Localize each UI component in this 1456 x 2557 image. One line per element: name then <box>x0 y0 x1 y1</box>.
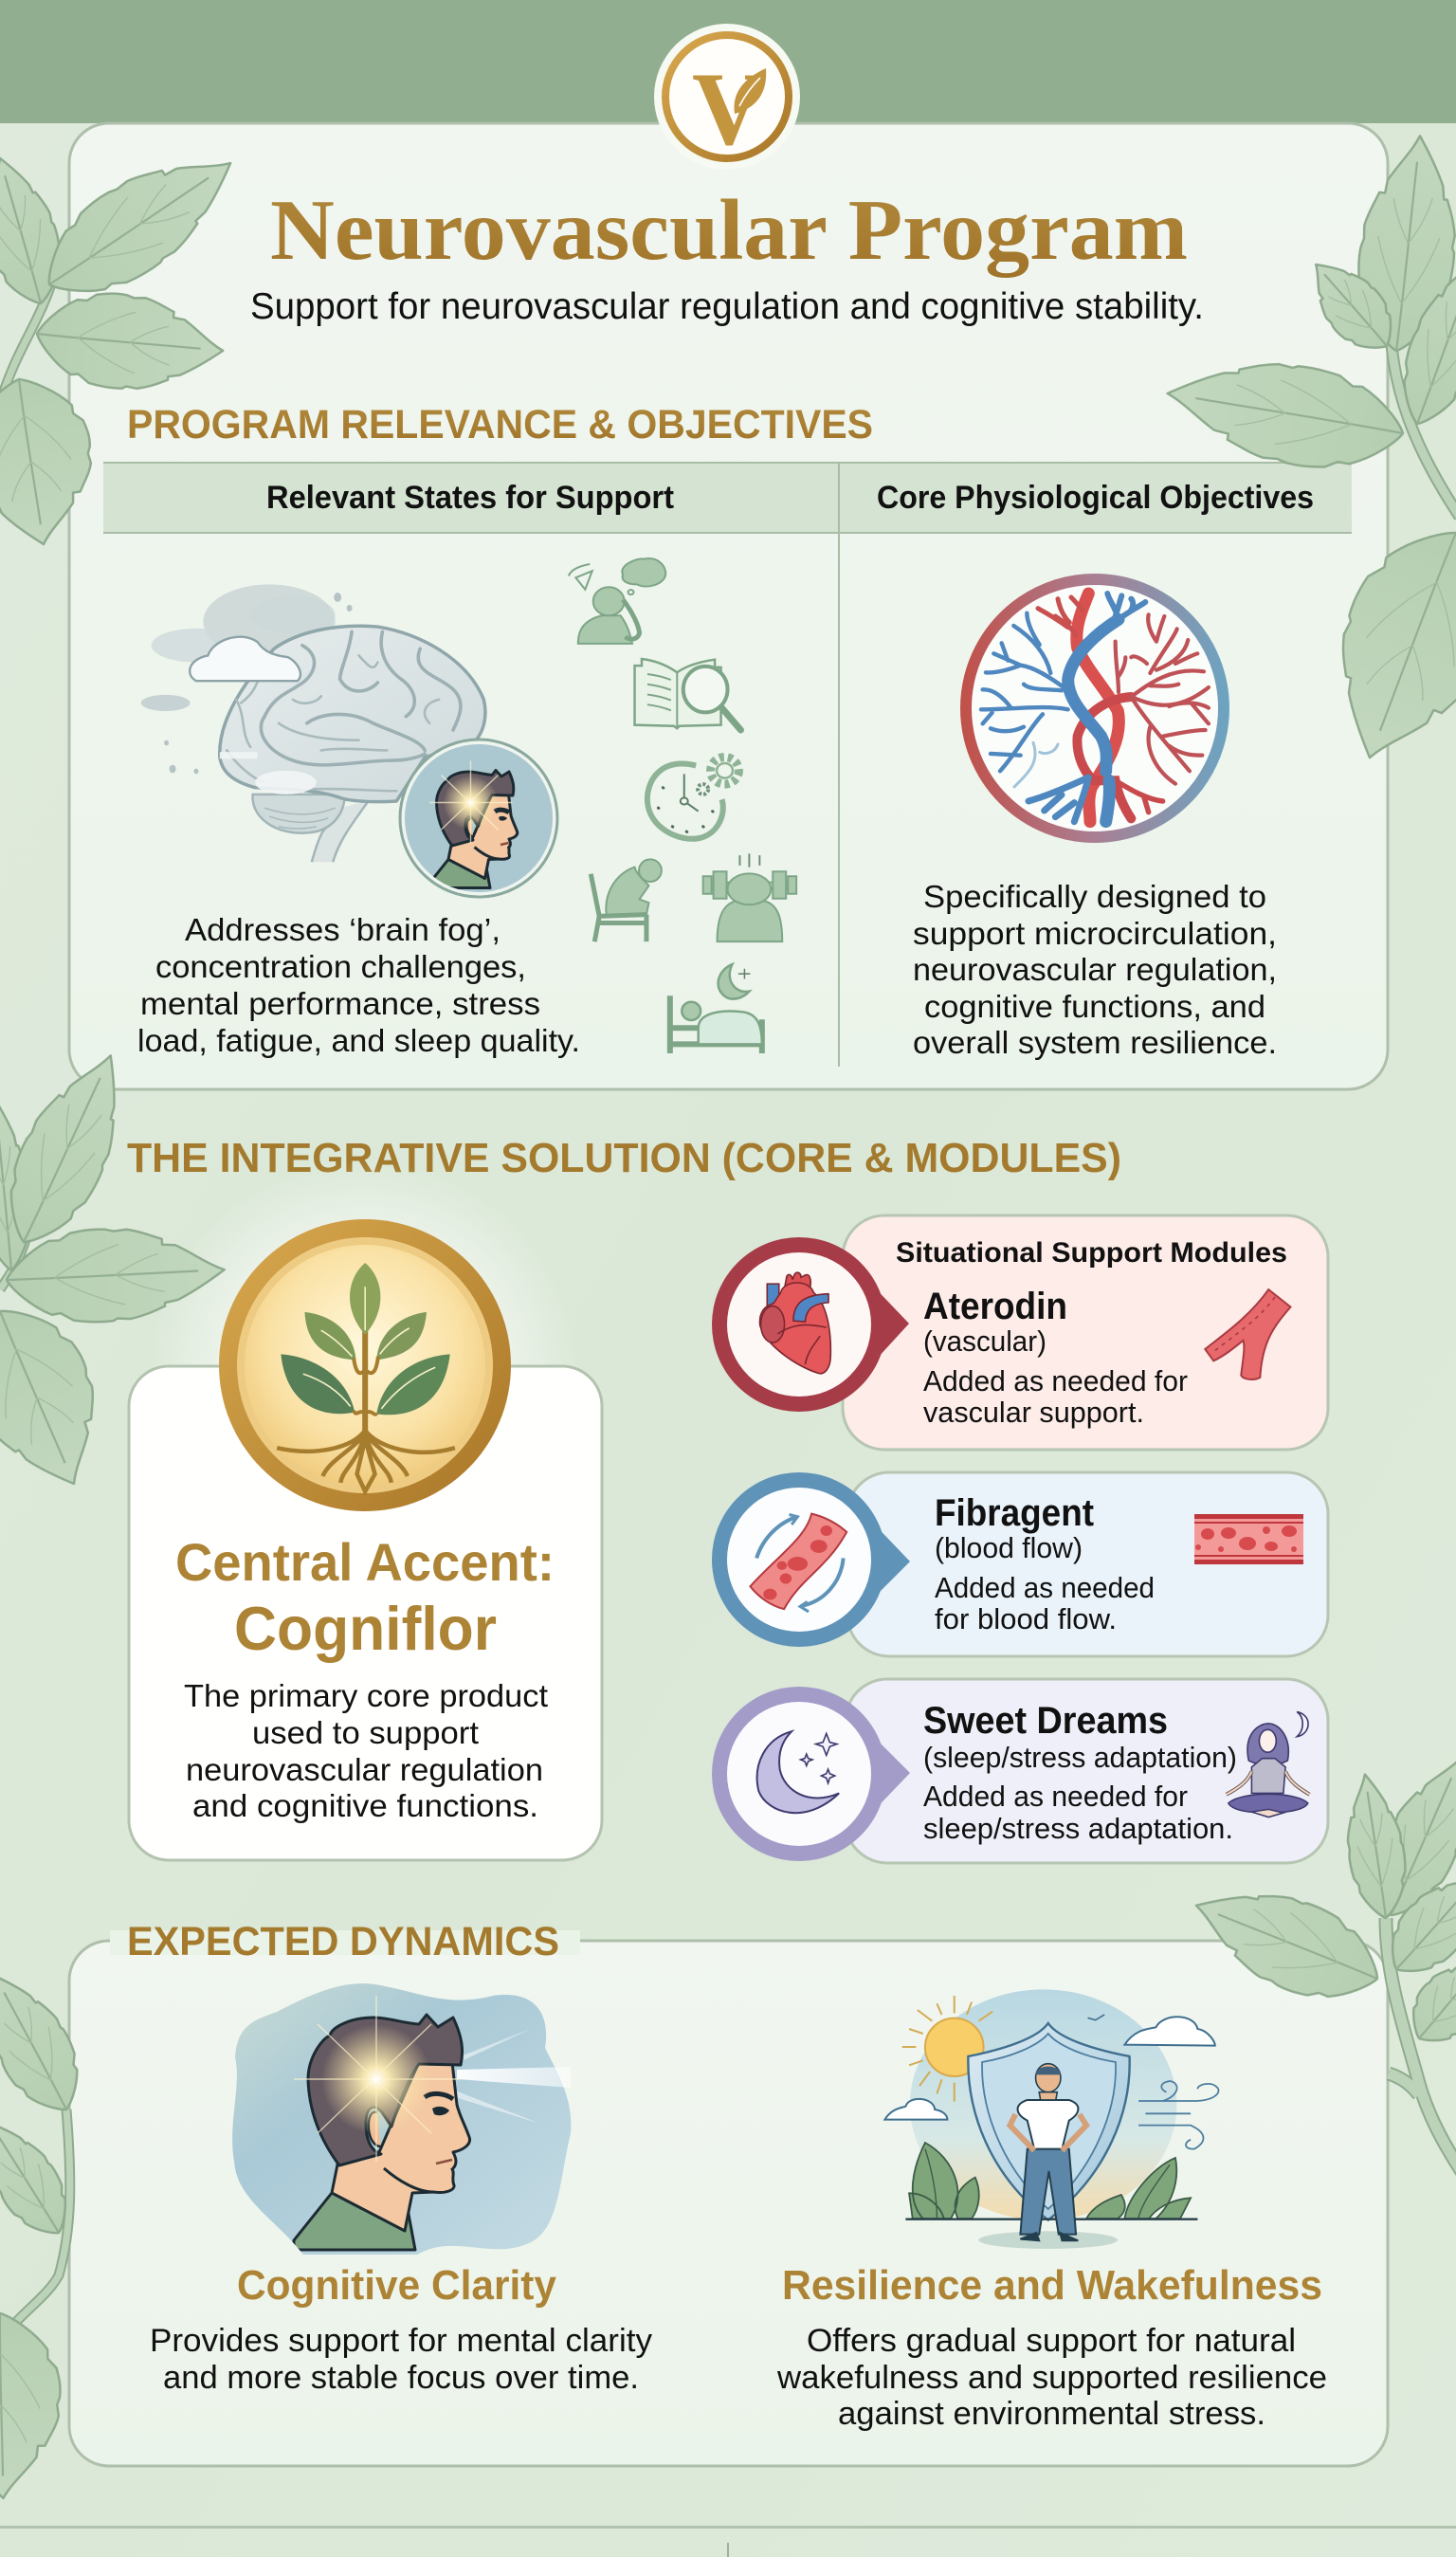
text: sweet dreams: (sleep/stress adaptation) <box>923 1741 1237 1774</box>
text: relevant states <box>137 912 580 1058</box>
text: core product <box>184 1678 548 1823</box>
icon: sleeping person with moon <box>670 964 762 1053</box>
subtitle: Support for neurovascular regulation and cognitive stability. <box>250 286 1204 327</box>
illustration: cognitive clarity head <box>232 1983 571 2255</box>
logo emblem: V <box>692 51 766 167</box>
illustration: neurovascular tree <box>966 579 1224 837</box>
text: core product: used to support <box>252 1715 479 1750</box>
icon: confused person <box>569 558 665 644</box>
text: relevant states: concentration challenges, <box>155 949 526 984</box>
illustration: man with glowing mind <box>400 740 557 897</box>
text: cognitive clarity: Provides support for mental clarity <box>150 2323 652 2359</box>
heading: situational support modules: Situational Support Modules <box>896 1237 1287 1269</box>
panel: aterodin module <box>712 1215 1328 1450</box>
text: fibragent: (blood flow) <box>935 1531 1083 1564</box>
heading: program relevance: PROGRAM RELEVANCE & OBJECTIVES <box>127 402 873 447</box>
text: sweet dreams <box>923 1700 1237 1845</box>
text: cognitive clarity <box>150 2323 652 2396</box>
text: sweet dreams: Sweet Dreams <box>923 1700 1168 1742</box>
text: core product: neurovascular regulation <box>186 1752 543 1787</box>
text: resilience <box>776 2323 1327 2432</box>
icon: exhausted seated person <box>591 859 662 941</box>
text: cognitive clarity: and more stable focus over time. <box>163 2360 639 2396</box>
text: aterodin <box>923 1286 1188 1429</box>
decorative leaves: bottom left <box>0 1960 98 2499</box>
text: relevant states: load, fatigue, and sleep quality. <box>137 1023 580 1058</box>
text: core objectives: support microcirculation, <box>913 916 1277 951</box>
icon: meditating woman <box>1227 1712 1310 1817</box>
icon: moon badge <box>712 1687 910 1861</box>
decorative leaves: middle left <box>0 1038 227 1507</box>
icon: blood vessel segment <box>1194 1514 1303 1564</box>
text: core objectives: neurovascular regulation, <box>913 952 1277 987</box>
text: core objectives: Specifically designed to <box>923 879 1266 914</box>
heading: cognitive clarity: Cognitive Clarity <box>237 2262 557 2309</box>
illustration: foggy brain <box>141 584 485 862</box>
icon: person under dumbbell <box>703 853 796 941</box>
text: fibragent: Added as needed <box>935 1571 1155 1604</box>
decorative leaves: top right <box>1159 131 1456 783</box>
footer rule and divider <box>0 2526 1456 2557</box>
illustration: resilience shield <box>884 1989 1219 2249</box>
text: relevant states: Addresses ‘brain fog’, <box>185 912 500 947</box>
text: core objectives: cognitive functions, and <box>924 989 1265 1024</box>
text: core product: and cognitive functions. <box>192 1788 538 1823</box>
logo emblem <box>654 24 800 170</box>
text: core objectives <box>913 879 1277 1060</box>
panel: sweet dreams module <box>712 1679 1328 1863</box>
table header band <box>103 462 1352 1067</box>
icon: heart badge <box>712 1237 909 1412</box>
heading: cogniflor: Cogniflor <box>234 1594 497 1663</box>
text: aterodin: vascular support. <box>923 1396 1144 1429</box>
panel: program relevance and objectives <box>69 123 1388 1089</box>
table header band: Core Physiological Objectives <box>877 480 1314 516</box>
icon: blood flow badge <box>712 1472 910 1647</box>
header band <box>0 0 1456 123</box>
text: resilience: against environmental stress. <box>838 2396 1265 2432</box>
heading: central accent: Central Accent: <box>175 1532 555 1592</box>
text: sweet dreams: Added as needed for <box>923 1780 1188 1813</box>
heading: resilience and wakefulness: Resilience and Wakefulness <box>782 2262 1322 2309</box>
icon: branching artery <box>1205 1289 1290 1379</box>
panel: central accent <box>129 1161 602 1860</box>
heading: expected dynamics: EXPECTED DYNAMICS <box>127 1919 559 1964</box>
text: fibragent: Fibragent <box>935 1492 1094 1534</box>
icon: open book and magnifier <box>635 659 740 730</box>
table header band: Relevant States for Support <box>266 480 674 516</box>
text: relevant states: mental performance, stress <box>140 986 540 1021</box>
panel: fibragent module <box>712 1472 1328 1656</box>
panel: expected dynamics <box>69 1919 1388 2466</box>
text: resilience: Offers gradual support for natural <box>807 2323 1296 2359</box>
heading: integrative solution: THE INTEGRATIVE SOLUTION (CORE & MODULES) <box>127 1135 1121 1181</box>
text: core product: The primary core product <box>184 1678 548 1713</box>
text: fibragent: for blood flow. <box>935 1602 1117 1635</box>
decorative leaves: bottom right <box>1180 1744 1456 2176</box>
text: resilience: wakefulness and supported resilience <box>776 2360 1327 2396</box>
decorative leaves: top left <box>0 127 255 554</box>
icon: clock and gears <box>647 758 738 839</box>
text: aterodin: Added as needed for <box>923 1364 1188 1397</box>
text: aterodin: (vascular) <box>923 1324 1046 1358</box>
text: core objectives: overall system resilience. <box>913 1025 1277 1060</box>
title: Neurovascular Program <box>270 182 1188 278</box>
text: sweet dreams: sleep/stress adaptation. <box>923 1812 1233 1845</box>
text: fibragent <box>935 1492 1155 1635</box>
text: aterodin: Aterodin <box>923 1286 1067 1327</box>
icon: golden plant coin <box>219 1219 511 1511</box>
